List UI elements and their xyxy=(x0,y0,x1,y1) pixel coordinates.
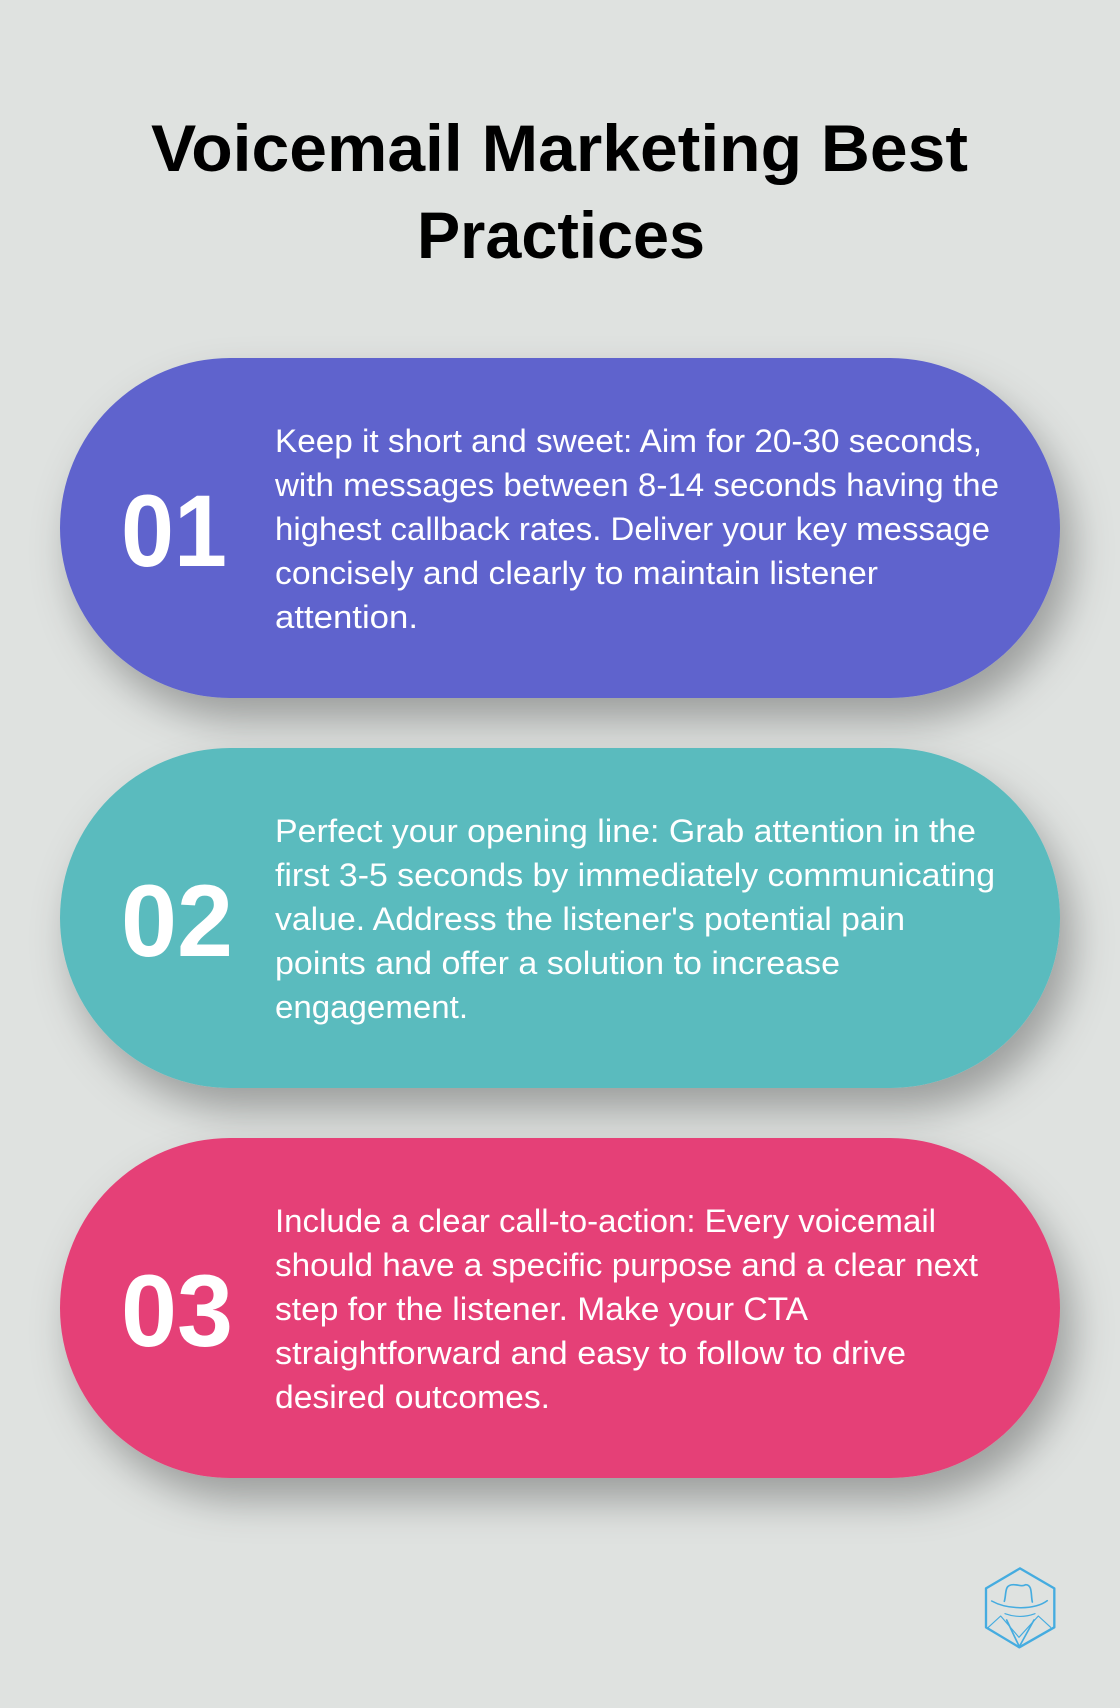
text block: step 03: straightforward and easy to follow to drive xyxy=(275,1335,906,1371)
text block: step 03: step for the listener. Make your CTA xyxy=(275,1291,809,1327)
text block: step 03: desired outcomes. xyxy=(275,1379,550,1415)
title: Practices xyxy=(417,198,705,272)
number: 01: 01 xyxy=(121,474,227,588)
panel: step 01 xyxy=(60,358,1060,698)
pill background: step 02 xyxy=(60,748,1060,1088)
panel: step 03 xyxy=(60,1138,1060,1478)
text block: step 02: value. Address the listener's potential pain xyxy=(275,901,905,937)
text block: step 01: with messages between 8-14 seconds having the xyxy=(274,467,999,503)
text block: step 01: highest callback rates. Deliver your key message xyxy=(275,511,990,547)
text block: step 01 xyxy=(274,423,999,635)
text block: step 03 xyxy=(275,1203,978,1415)
number: 02: 02 xyxy=(121,864,233,978)
pill background: step 03 xyxy=(60,1138,1060,1478)
title: Voicemail Marketing Best xyxy=(151,111,968,185)
text block: step 02: points and offer a solution to increase xyxy=(275,945,840,981)
text block: step 02: engagement. xyxy=(275,989,468,1025)
text block: step 03: Include a clear call-to-action: Every voicemail xyxy=(275,1203,936,1239)
icon: spy hat hexagon logo xyxy=(986,1568,1054,1647)
text block: step 01: attention. xyxy=(275,599,418,635)
title xyxy=(151,111,968,272)
text block: step 01: Keep it short and sweet: Aim for 20-30 seconds, xyxy=(275,423,982,459)
text block: step 01: concisely and clearly to maintain listener xyxy=(275,555,878,591)
panel: step 02 xyxy=(60,748,1060,1088)
pill background: step 01 xyxy=(60,358,1060,698)
text block: step 02: first 3-5 seconds by immediately communicating xyxy=(275,857,995,893)
text block: step 02 xyxy=(275,813,995,1025)
text block: step 03: should have a specific purpose and a clear next xyxy=(275,1247,978,1283)
text block: step 02: Perfect your opening line: Grab attention in the xyxy=(275,813,976,849)
number: 03: 03 xyxy=(121,1254,233,1368)
